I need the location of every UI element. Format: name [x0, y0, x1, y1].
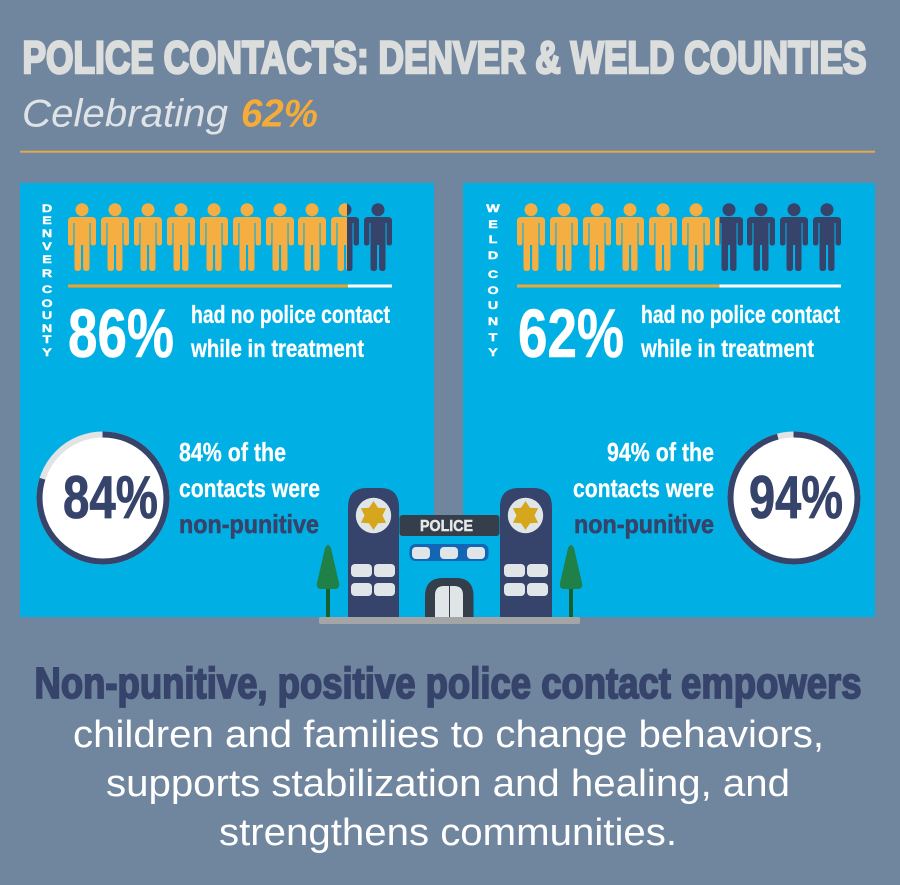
progress bar	[68, 284, 392, 288]
police sign: POLICE	[420, 518, 473, 535]
left tower	[348, 488, 399, 617]
donut caption: contacts were	[179, 473, 320, 503]
badges	[356, 498, 543, 533]
stat: 86%: 86%	[68, 295, 174, 372]
stat: 62%: 62%	[518, 295, 624, 372]
label: Weld County: T	[489, 331, 498, 344]
icon: police station	[317, 470, 582, 624]
label: Weld County	[486, 202, 501, 359]
police sign	[400, 515, 500, 536]
label: Denver County: N	[42, 322, 52, 335]
stat text: while in treatment	[190, 335, 365, 363]
pictogram: 62% of people	[517, 203, 841, 271]
label: Denver County: C	[42, 283, 52, 296]
label: Denver County: D	[42, 202, 52, 215]
donut caption: contacts were	[573, 473, 714, 503]
label: Weld County: L	[489, 233, 498, 246]
stat text: had no police contact	[191, 301, 391, 329]
progress bar	[517, 284, 841, 288]
label: Denver County: Y	[42, 346, 52, 359]
closing text	[73, 714, 824, 854]
label: Denver County: O	[41, 297, 53, 310]
donut caption	[179, 437, 320, 539]
subtitle	[22, 92, 318, 136]
label: Weld County: C	[488, 268, 498, 281]
closing text: strengthens communities.	[219, 812, 677, 854]
door	[425, 578, 474, 617]
trees	[317, 545, 582, 617]
stat text	[640, 301, 841, 363]
label: Weld County: D	[488, 249, 498, 262]
right tower	[500, 488, 552, 617]
label: Denver County: T	[43, 333, 52, 346]
donut caption: non-punitive	[179, 509, 319, 539]
donut caption: 94% of the	[607, 437, 714, 467]
donut: 84%	[40, 434, 166, 562]
label: Weld County: N	[488, 315, 498, 328]
closing text: supports stabilization and healing, and	[106, 763, 790, 805]
panel: Weld County	[463, 183, 875, 617]
stat text: had no police contact	[641, 301, 841, 329]
stat text: while in treatment	[640, 335, 815, 363]
pictogram: 86% of people	[68, 203, 392, 271]
donut: 84%: 84%	[63, 464, 158, 531]
front windows	[410, 544, 488, 561]
donut: 94%	[730, 434, 858, 562]
donut caption: 84% of the	[179, 437, 286, 467]
label: Weld County: O	[487, 284, 499, 297]
closing text: children and families to change behaviors,	[73, 714, 824, 756]
donut caption	[573, 437, 714, 539]
tower windows	[351, 564, 548, 596]
panel: Denver County	[20, 183, 434, 617]
label: Weld County: Y	[488, 346, 498, 359]
donut caption: non-punitive	[574, 509, 714, 539]
donut: 94%: 94%	[749, 464, 843, 531]
label: Denver County	[41, 202, 53, 359]
label: Denver County: E	[42, 214, 52, 227]
label: Weld County: W	[486, 202, 501, 215]
ground	[319, 617, 580, 624]
label: Denver County: R	[42, 267, 52, 280]
label: Denver County: E	[42, 253, 52, 266]
subtitle: 62%	[241, 92, 318, 136]
label: Weld County: E	[488, 218, 498, 231]
label: Denver County: U	[42, 309, 52, 322]
subtitle: Celebrating	[22, 92, 228, 136]
stat text	[190, 301, 391, 363]
label: Weld County: U	[488, 299, 498, 312]
label: Denver County: N	[42, 227, 52, 240]
label: Denver County: V	[42, 240, 52, 253]
